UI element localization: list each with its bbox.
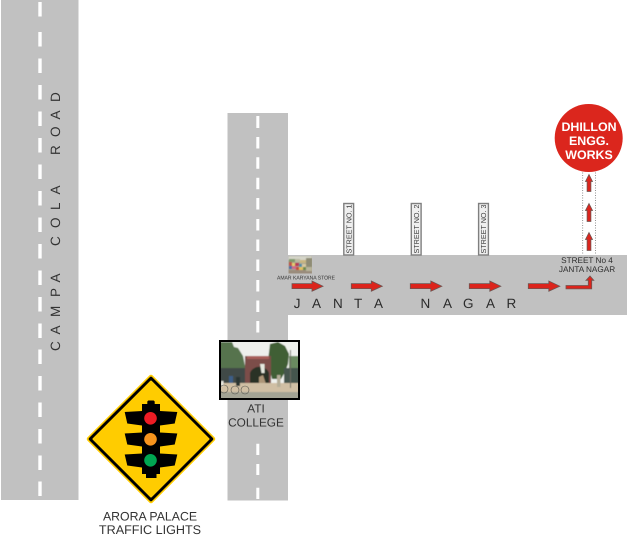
road name: Campa Cola Road [48, 92, 63, 351]
arrow 5 [528, 281, 560, 291]
road name: Janta Nagar: T [354, 296, 362, 311]
destination marker: Dhillon Engg. Works [555, 104, 623, 172]
road name: Campa Cola Road: R [48, 145, 63, 155]
road name: Janta Nagar: A [443, 296, 452, 311]
road name: Janta Nagar: A [374, 296, 383, 311]
street 4 label [559, 256, 615, 274]
arrow 3 [410, 281, 442, 291]
road name: Campa Cola Road: C [48, 341, 63, 351]
road name: Campa Cola Road: D [48, 92, 63, 102]
label: ATI College [228, 402, 284, 430]
amber light [144, 433, 157, 446]
up arrow 3 [586, 232, 592, 250]
road: Campa Cola Road [1, 0, 78, 500]
destination marker: Dhillon Engg. Works: DHILLON [561, 120, 617, 134]
road name: Campa Cola Road: P [48, 288, 63, 297]
store label: AMAR KARYANA STORE [277, 276, 335, 282]
road name: Campa Cola Road: A [48, 325, 63, 334]
label: Arora Palace traffic lights: ARORA PALACE [103, 510, 197, 524]
road name: Janta Nagar: A [312, 296, 321, 311]
street 4 label: JANTA NAGAR [559, 265, 615, 274]
street sign: Street No. 2: STREET NO. 2 [412, 204, 421, 254]
street 4 label: STREET No 4 [561, 256, 613, 265]
up arrow 1 [586, 174, 592, 192]
arrow 1 [292, 281, 323, 291]
street sign: Street No. 3: STREET NO. 3 [479, 204, 488, 254]
road name: Janta Nagar: J [294, 296, 301, 311]
road: Janta Nagar [288, 255, 627, 315]
green light [144, 454, 157, 467]
red light [144, 412, 157, 425]
destination marker: Dhillon Engg. Works: ENGG. [569, 134, 609, 148]
road name: Campa Cola Road: A [48, 110, 63, 120]
arrow 4 [469, 281, 501, 291]
label: ATI College: ATI [247, 402, 265, 416]
road name: Janta Nagar: G [463, 296, 474, 311]
up arrow 2 [586, 204, 592, 222]
road name: Janta Nagar: A [486, 296, 495, 311]
road: college road [228, 113, 288, 500]
road name: Campa Cola Road: A [48, 273, 63, 282]
dotted lane: street 4 [583, 170, 596, 255]
traffic light body [125, 400, 177, 478]
label: ATI College: COLLEGE [228, 416, 284, 430]
road name: Janta Nagar: N [420, 296, 430, 311]
road name: Janta Nagar: N [333, 296, 343, 311]
arrow 2 [351, 281, 382, 291]
label: Arora Palace traffic lights [99, 510, 201, 535]
photo: ATI College gate [219, 340, 300, 400]
road name: Campa Cola Road: L [48, 202, 63, 210]
road name: Campa Cola Road: A [48, 185, 63, 194]
road name: Campa Cola Road: C [48, 236, 63, 246]
road name: Campa Cola Road: O [48, 217, 63, 228]
store photo: Amar Karyana Store [288, 256, 312, 274]
road name: Campa Cola Road: O [48, 126, 63, 137]
destination marker: Dhillon Engg. Works: WORKS [565, 148, 613, 162]
road name: Campa Cola Road: M [48, 306, 63, 317]
icon: traffic light warning sign [89, 377, 213, 501]
arrow: turn up into street 4 [566, 276, 594, 289]
street sign: Street No. 1: STREET NO. 1 [344, 204, 353, 254]
road name: Janta Nagar: R [506, 296, 516, 311]
